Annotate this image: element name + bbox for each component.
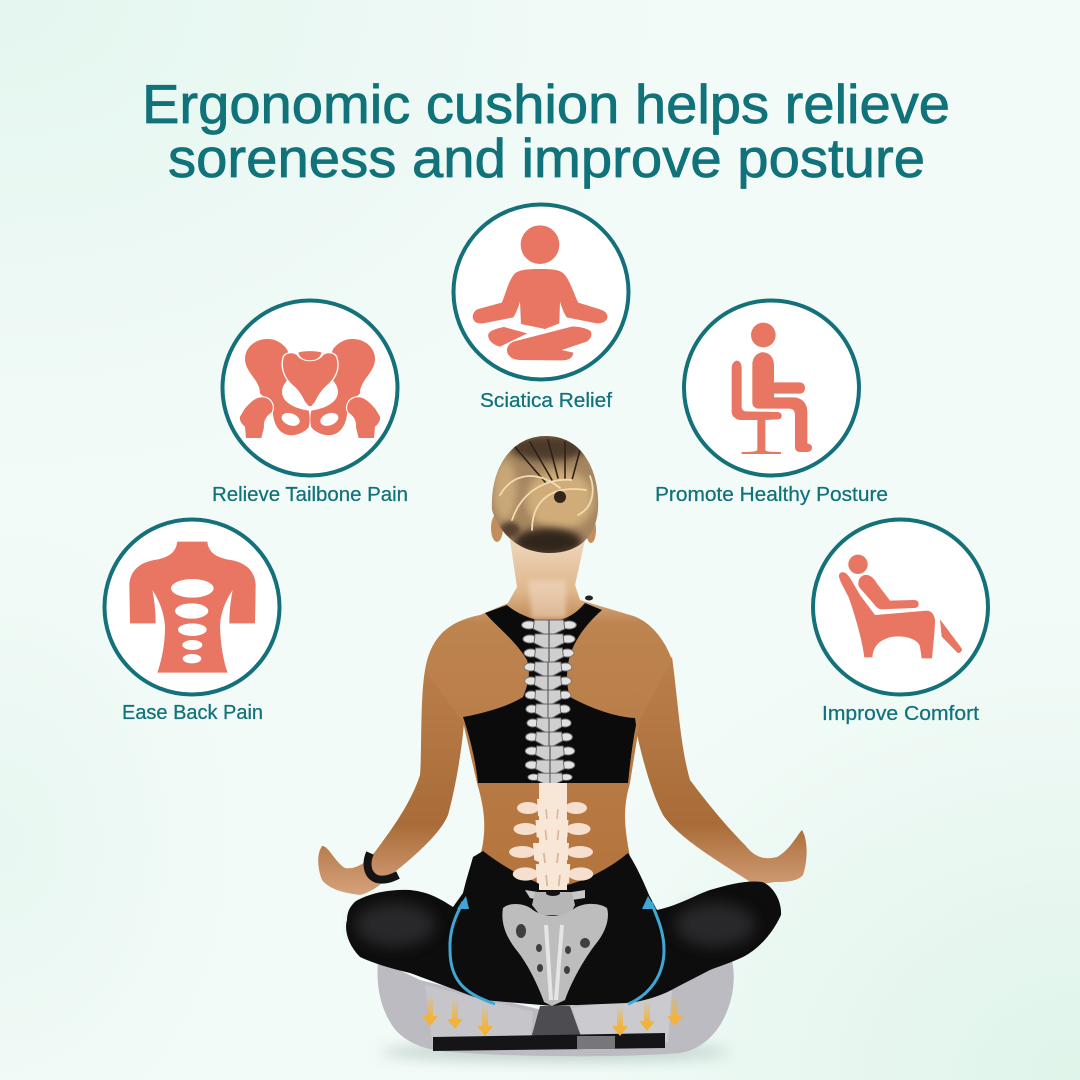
torso and neck — [425, 540, 672, 895]
strap and buckle — [433, 1033, 665, 1051]
label: Improve Comfort — [822, 703, 979, 725]
benefit: Ease Back Pain — [104, 520, 280, 724]
lumbar joint over leggings — [525, 890, 585, 915]
hair tie detail — [585, 596, 593, 600]
yellow pressure arrows — [422, 995, 683, 1036]
label: Ease Back Pain — [122, 702, 263, 724]
title: soreness and improve posture — [168, 127, 925, 189]
icon circle: pelvis — [222, 300, 398, 476]
leggings sheen — [355, 903, 755, 947]
sacrum bone — [502, 904, 608, 1006]
person seated on cushion — [318, 432, 807, 1062]
icon circle: back torso — [104, 520, 280, 694]
benefit: Relieve Tailbone Pain — [212, 300, 408, 506]
neck vertebrae (faded) — [528, 580, 566, 618]
sports bra — [463, 603, 636, 783]
icon circle: meditation — [454, 204, 628, 380]
benefit: Sciatica Relief — [454, 204, 628, 412]
cushion — [378, 960, 734, 1062]
wristband — [368, 853, 398, 880]
thoracic spine — [522, 620, 576, 785]
label: Promote Healthy Posture — [655, 484, 888, 506]
icon circle: seated person — [684, 300, 859, 476]
blue curve arrow left — [450, 896, 495, 1004]
label: Relieve Tailbone Pain — [212, 484, 408, 506]
hair — [492, 436, 598, 553]
benefit: Improve Comfort — [813, 520, 988, 725]
cushion centre gap — [530, 1006, 583, 1042]
title: Ergonomic cushion helps relieve — [142, 73, 950, 135]
lumbar spine — [509, 783, 593, 890]
ears — [491, 514, 596, 543]
icon circle: recliner — [813, 520, 988, 694]
arms — [318, 657, 807, 895]
leggings — [346, 851, 781, 1006]
benefit: Promote Healthy Posture — [655, 300, 888, 506]
label: Sciatica Relief — [480, 390, 612, 412]
title — [142, 73, 950, 189]
blue curve arrow right — [628, 896, 664, 1004]
